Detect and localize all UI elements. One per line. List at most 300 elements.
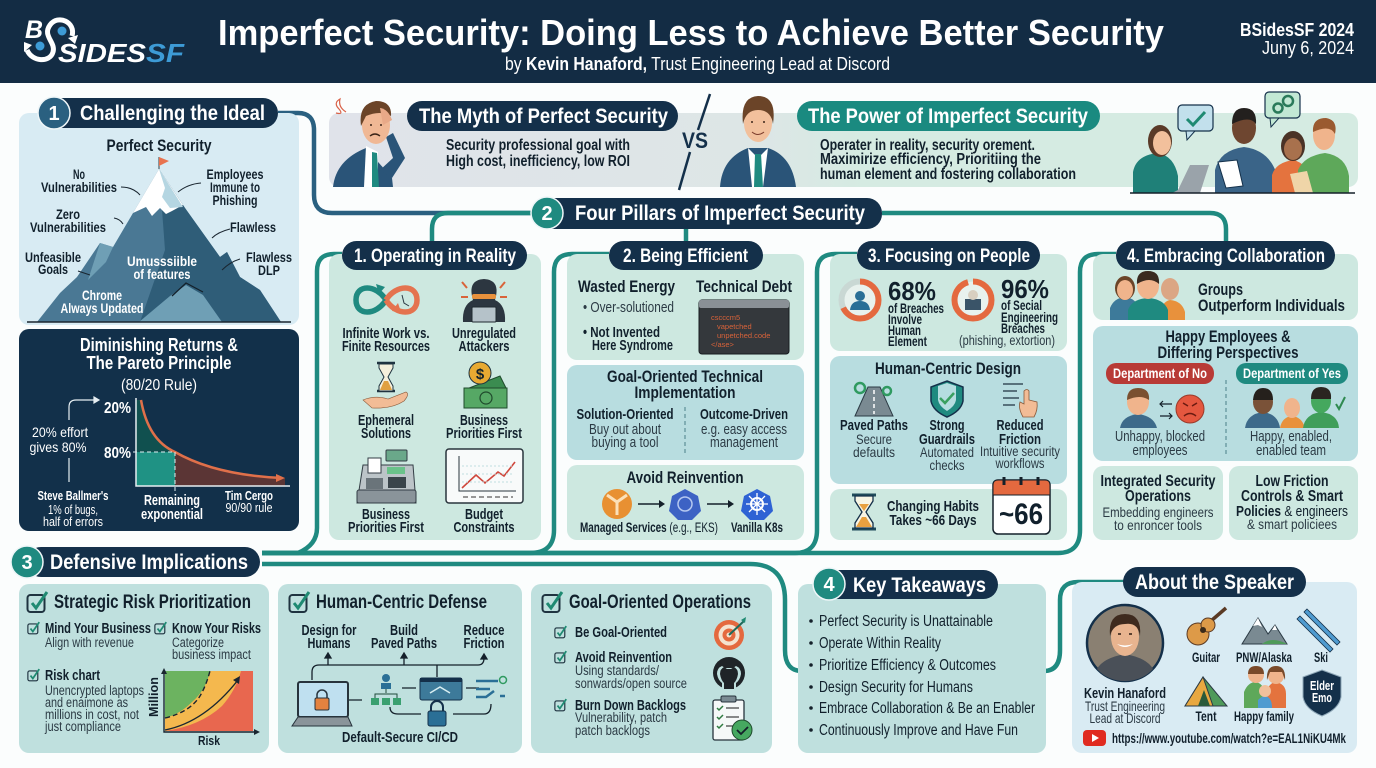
pillar 1 labels row one: Infinite Work vs. (342, 325, 430, 342)
section 1: challenging the ideal (19, 97, 299, 531)
interest labels row one: Guitar (1192, 650, 1221, 665)
takeaway list: Embrace Collaboration & Be an Enabler (819, 700, 1035, 717)
icon: checkbox (290, 592, 309, 612)
know your risks: Categorize (172, 635, 224, 650)
wasted energy text: Wasted Energy (578, 277, 675, 296)
icon: elder emo badge: Elder (1310, 678, 1334, 693)
stat: 68 percent: 68% (888, 276, 936, 306)
pillar 1 labels row two: Solutions (361, 425, 411, 442)
pareto labels (30, 424, 273, 529)
risk heat chart (146, 668, 260, 748)
mountain labels: of features (134, 266, 191, 282)
burn down backlogs (575, 697, 686, 738)
pillar 1 labels row one: Attackers (458, 338, 510, 355)
human-centric labels: Secure (856, 431, 892, 447)
heading: defensive implications: 3 (21, 552, 33, 574)
interest labels row two (1196, 709, 1294, 724)
mountain labels: Goals (38, 261, 68, 277)
know your risks: business impact (172, 647, 251, 662)
stat: 96 percent: of Secial (1001, 298, 1042, 313)
department of no: Department of No (1113, 365, 1207, 381)
interest labels row one: PNW/Alaska (1236, 650, 1292, 665)
know your risks (172, 620, 261, 662)
pareto heading: The Pareto Principle (86, 353, 232, 373)
panel: pillar 2 being efficient (567, 241, 804, 540)
integrated security text (1100, 473, 1216, 533)
panel: goal-oriented operations (531, 584, 772, 753)
panel: diminishing returns (19, 329, 299, 531)
myth description: Security professional goal with (446, 137, 630, 154)
about heading (1123, 567, 1306, 597)
low friction text (1236, 473, 1348, 532)
wasted energy text: Here Syndrome (592, 337, 673, 354)
department of no (1106, 363, 1214, 384)
integrated security text: Integrated Security (1100, 473, 1216, 490)
donut: 68 percent (842, 282, 878, 318)
reinvention labels: Managed Services (e.g., EKS) (580, 519, 718, 535)
avoid reinvention text (575, 649, 687, 691)
risk heat chart: Risk (198, 733, 221, 748)
divider (1225, 380, 1227, 455)
logo: BSidesSF (24, 16, 185, 68)
icon: calendar 66: ~66 (999, 498, 1043, 531)
department of yes (1236, 363, 1348, 384)
burn down backlogs: patch backlogs (575, 723, 650, 738)
wasted energy text: • Not Invented (583, 324, 660, 341)
sub-panel: goal-oriented implementation (567, 365, 804, 460)
icon: team collaborating (1130, 92, 1355, 193)
icon: paved paths (855, 383, 893, 416)
pareto heading: (80/20 Rule) (121, 377, 197, 394)
human-centric labels: defaults (853, 444, 895, 460)
happy employees captions: Happy, enabled, (1250, 428, 1332, 445)
human-centric labels: Automated (920, 444, 974, 460)
burn down backlogs: Burn Down Backlogs (575, 697, 686, 714)
technical debt: Technical Debt (696, 277, 792, 296)
speaker name (1084, 685, 1166, 726)
technical debt (696, 277, 792, 354)
myth description (446, 137, 630, 170)
takeaway list: Prioritize Efficiency & Outcomes (819, 657, 996, 674)
heading: four pillars (531, 197, 882, 229)
pillar 1 labels row three: Constraints (454, 519, 514, 536)
icon: managed services to vanilla k8s (602, 489, 773, 520)
heading: challenging the ideal (38, 97, 278, 129)
pareto labels: Tim Cergo (225, 488, 273, 503)
pareto labels: half of errors (43, 514, 103, 529)
sub-panel: wasted energy and debt (567, 254, 804, 360)
stat: 96 percent: Breaches (1001, 321, 1045, 336)
mountain labels: Zero (56, 206, 80, 222)
pillar 1 labels row two: Ephemeral (358, 412, 414, 429)
logo: BSidesSF: B (25, 16, 43, 44)
stat: 68 percent: Involve (888, 312, 922, 327)
goal-oriented text (576, 367, 788, 455)
power description (820, 137, 1076, 183)
mountain labels (25, 166, 292, 316)
myth heading: The Myth of Perfect Security (419, 105, 668, 128)
technical debt: </ase> (711, 340, 735, 349)
icon: padlock (428, 701, 446, 726)
mountain labels: Phishing (212, 192, 258, 208)
interest labels row one (1192, 650, 1328, 665)
sub-panel: integrated security (1093, 466, 1223, 540)
panel title: Goal-Oriented Operations (569, 592, 751, 613)
connector lines (262, 113, 1226, 671)
mountain labels: Vulnerabilities (41, 179, 117, 195)
happy employees captions: enabled team (1256, 442, 1326, 459)
panel: pillar 1 operating in reality (329, 241, 541, 540)
icon: checkbox (28, 592, 47, 612)
event and date: BSidesSF 2024 (1240, 20, 1354, 40)
mountain labels: No (73, 166, 85, 182)
risk heat chart: Million (146, 677, 161, 717)
pareto labels: gives 80% (30, 439, 86, 455)
wasted energy text (578, 277, 675, 354)
subtitle: by Kevin Hanaford, Trust Engineering Lead at Discord (505, 54, 890, 74)
defense labels: Build (390, 622, 418, 639)
key takeaways heading: 4 (823, 574, 835, 596)
panel title: Human-Centric Defense (316, 592, 487, 613)
icon: small checkbox (28, 669, 39, 681)
human-centric labels: Guardrails (919, 431, 975, 448)
pareto labels: Remaining (144, 492, 200, 509)
icon: github (713, 657, 745, 689)
risk chart text: Risk chart (45, 667, 100, 684)
icon: browser pipeline (420, 678, 462, 700)
panel: perfect security mountain (19, 113, 299, 325)
sub-panel: changing habits (830, 489, 1067, 540)
pareto labels: 1% of bugs, (48, 502, 98, 517)
icon: cash register (357, 450, 416, 503)
power heading: The Power of Imperfect Security (808, 105, 1088, 128)
icon: guitar (1187, 608, 1226, 645)
icon: infinite loop (356, 284, 417, 312)
icon: elder emo badge (1303, 670, 1341, 716)
icon: money (464, 362, 507, 408)
stat: 96 percent: 96% (1001, 274, 1049, 304)
groups text (1198, 280, 1345, 315)
pillar 4 heading: 4. Embracing Collaboration (1127, 246, 1325, 267)
heading: four pillars: Four Pillars of Imperfect Security (575, 202, 865, 225)
happy employees heading (1158, 327, 1298, 362)
happy employees heading: Happy Employees & (1166, 327, 1290, 346)
heading: defensive implications: Defensive Implications (50, 551, 248, 574)
heading: defensive implications (11, 546, 260, 578)
interest labels row two: Tent (1196, 709, 1217, 724)
pillar 4 heading (1116, 241, 1335, 270)
mountain labels: Immune to (210, 179, 260, 195)
pareto curve chart: 80% (104, 445, 131, 462)
panel: myth versus power (329, 92, 1358, 193)
pillar 3 heading: 3. Focusing on People (868, 246, 1030, 267)
icon: target (714, 617, 746, 650)
pareto labels: 20% effort (32, 424, 88, 440)
stat: 68 percent (888, 276, 944, 349)
happy employees captions: Unhappy, blocked (1115, 428, 1205, 445)
mountain subtitle: Perfect Security (106, 136, 212, 155)
icon: mountains (1242, 618, 1287, 644)
icon: hourglass in hand (363, 363, 408, 408)
takeaway list: Continuously Improve and Have Fun (819, 722, 1018, 739)
myth description: High cost, inefficiency, low ROI (446, 153, 630, 170)
human-centric labels: workflows (995, 456, 1045, 471)
technical debt: cscccm5 (711, 313, 740, 322)
panel: about the speaker (1072, 567, 1357, 753)
icon: calendar 66 (993, 477, 1050, 534)
defense labels: Paved Paths (371, 635, 437, 652)
low friction text: Low Friction (1256, 473, 1328, 490)
sub-panel: breach statistics (830, 254, 1067, 351)
panel: key takeaways (798, 568, 1046, 753)
defense labels: Design for (302, 622, 357, 639)
risk chart text: just compliance (44, 719, 121, 734)
takeaway list (819, 613, 1035, 739)
human-centric labels (840, 417, 1060, 473)
stat: 96 percent (959, 274, 1058, 348)
goal-oriented text: Implementation (634, 383, 736, 402)
icon: confident man (720, 96, 796, 187)
pillar 1 heading: 1. Operating in Reality (354, 246, 516, 267)
icon: small checkbox (555, 626, 566, 638)
wasted energy text: • Over-solutioned (583, 299, 674, 316)
icon: reduced friction (1003, 384, 1037, 417)
burn down backlogs: Vulnerability, patch (575, 710, 667, 725)
icon: small checkbox (555, 699, 566, 711)
defense labels: Friction (464, 635, 504, 652)
happy employees captions (1115, 428, 1332, 459)
pillar 1 labels row three: Business (362, 506, 410, 523)
icon: youtube (1083, 730, 1106, 746)
mountain labels: DLP (258, 262, 280, 278)
panel: pillar 4 embracing collaboration (1093, 241, 1358, 540)
integrated security text: Embedding engineers (1102, 504, 1214, 520)
pillar 1 labels row two: Business (460, 412, 508, 429)
goal-oriented text: Goal-Oriented Technical (607, 367, 763, 386)
heading: four pillars: 2 (541, 203, 553, 225)
icon: small checkbox (155, 622, 166, 634)
takeaway list: Perfect Security is Unattainable (819, 613, 993, 630)
icon: hooded attacker (461, 279, 507, 322)
event and date: Juny 6, 2024 (1262, 38, 1354, 58)
pillar 1 labels row one (342, 325, 516, 355)
integrated security text: Operations (1125, 488, 1191, 505)
human-centric labels: checks (930, 457, 964, 473)
be goal-oriented: Be Goal-Oriented (575, 624, 667, 641)
pillar 2 heading (609, 241, 763, 270)
panel: strategic risk prioritization (19, 584, 269, 753)
pareto heading (80, 335, 238, 394)
icon: checkbox (542, 592, 562, 612)
pareto curve chart (104, 398, 290, 492)
bullet dots (809, 619, 813, 732)
icon: clipboard checklist (713, 696, 752, 740)
goal-oriented text: e.g. easy access (701, 421, 787, 438)
speaker name: Trust Engineering (1085, 698, 1165, 714)
workflow arrows (312, 653, 491, 714)
mountain labels: Employees (206, 166, 264, 182)
goal-oriented text: management (710, 434, 779, 451)
icon: group of three (1110, 271, 1185, 320)
title: Imperfect Security: Doing Less to Achieve Better Security (218, 12, 1164, 53)
icon: happy team (1245, 387, 1345, 428)
heading: challenging the ideal: 1 (48, 103, 60, 125)
power description: Operater in reality, security orement. (820, 137, 1035, 154)
changing habits text: Changing Habits (887, 498, 979, 515)
versus divider: VS (682, 128, 708, 153)
stat: 68 percent: of Breaches (888, 301, 944, 316)
sub-panel: groups (1093, 254, 1358, 320)
key takeaways heading: Key Takeaways (853, 574, 986, 597)
technical debt: vapetched (717, 322, 752, 331)
pillar 1 labels row one: Unregulated (452, 325, 516, 342)
pareto labels: Steve Ballmer's (38, 488, 108, 503)
goal-oriented text: Outcome-Driven (700, 406, 788, 423)
goal-oriented text: Buy out about (589, 421, 662, 438)
logo: BSidesSF: SF (146, 38, 185, 68)
changing habits text (887, 498, 979, 529)
changing habits text: Takes ~66 Days (890, 512, 976, 529)
power heading (797, 101, 1100, 131)
speaker name: Lead at Discord (1090, 710, 1160, 726)
defense labels: Reduce (464, 622, 504, 639)
reinvention labels: Vanilla K8s (731, 519, 783, 535)
takeaway list: Design Security for Humans (819, 679, 973, 696)
sub-panel: human-centric design (830, 356, 1067, 484)
department of yes: Department of Yes (1243, 365, 1341, 381)
technical debt: unpetched.code (717, 331, 770, 340)
groups text: Groups (1198, 280, 1243, 299)
power description: Maximirize efficiency, Prioritiing the (820, 151, 1041, 168)
pillar 1 labels row one: Finite Resources (342, 338, 430, 355)
risk chart text: millions in cost, not (45, 707, 139, 722)
about heading: About the Speaker (1135, 571, 1294, 594)
icon: money: $ (476, 366, 485, 383)
sub-panel: avoid reinvention (567, 465, 804, 540)
human-centric labels: Friction (999, 431, 1041, 448)
mind your business: Align with revenue (45, 635, 134, 650)
defense labels (302, 622, 504, 652)
event and date (1240, 20, 1354, 58)
mountain labels: Umusssiible (127, 253, 197, 269)
pareto curve chart: 20% (104, 400, 131, 417)
goal-oriented text: Solution-Oriented (576, 406, 674, 423)
integrated security text: to enroncer tools (1114, 517, 1202, 533)
sub-panel: low friction (1229, 466, 1358, 540)
header banner (0, 0, 1376, 83)
icon: happy family (1244, 666, 1286, 708)
power description: human element and fostering collaboration (820, 166, 1076, 183)
mountain labels: Chrome (82, 287, 122, 303)
sub-panel: happy employees (1093, 326, 1358, 461)
pillar 1 labels row two: Priorities First (446, 425, 522, 442)
icon: guardrail shield (931, 381, 963, 417)
mind your business: Mind Your Business (45, 620, 151, 637)
avoid reinvention heading: Avoid Reinvention (626, 468, 744, 487)
interest labels row one: Ski (1314, 650, 1328, 665)
mountain labels: Flawless (230, 219, 276, 235)
panel title: Strategic Risk Prioritization (54, 592, 251, 613)
human-centric labels: Reduced (996, 417, 1044, 434)
icon: stressed man (333, 99, 405, 187)
human-centric labels: Paved Paths (840, 417, 908, 434)
versus divider (679, 94, 710, 190)
icon: flow lines (476, 676, 506, 697)
mountain labels: Vulnerabilities (30, 219, 106, 235)
happy employees captions: employees (1132, 442, 1188, 459)
stat: 68 percent: Human (888, 323, 921, 338)
heading: challenging the ideal: Challenging the Ideal (80, 102, 265, 125)
avoid reinvention text: Avoid Reinvention (575, 649, 672, 666)
pillar 1 heading (342, 241, 527, 270)
pillar 1 labels row two (358, 412, 522, 442)
stat: 96 percent: (phishing, extortion) (959, 333, 1055, 348)
low friction text: Controls & Smart (1241, 488, 1344, 505)
key takeaways heading (813, 568, 998, 600)
avoid reinvention text: Using standards/ (575, 663, 659, 678)
arrow: effort (69, 397, 99, 482)
speaker name: Kevin Hanaford (1084, 685, 1166, 702)
pillar 1 labels row three (348, 506, 514, 536)
low friction text: & smart policiees (1247, 516, 1337, 532)
pillar 1 labels row three: Budget (465, 506, 503, 523)
takeaway list: Operate Within Reality (819, 635, 941, 652)
mind your business (45, 620, 151, 650)
stat: 68 percent: Element (888, 334, 927, 349)
panel: pillar 3 focusing on people (830, 241, 1067, 540)
logo: BSidesSF: SIDES (58, 38, 147, 68)
pareto heading: Diminishing Returns & (80, 335, 238, 355)
icon: org tree (371, 674, 401, 705)
pareto labels: 90/90 rule (226, 500, 272, 515)
icon: secure laptop (292, 682, 352, 726)
happy employees heading: Differing Perspectives (1158, 343, 1298, 362)
icon: skis (1297, 609, 1340, 652)
panel: human-centric defense (278, 584, 522, 753)
pipeline caption: Default-Secure CI/CD (342, 729, 458, 746)
mountain labels: Flawless (246, 249, 292, 265)
avoid reinvention text: sonwards/open source (575, 676, 687, 691)
icon: tent (1185, 677, 1227, 706)
speaker photo (1087, 605, 1163, 681)
myth heading (407, 101, 678, 131)
icon: hourglass (852, 495, 876, 529)
interest labels row two: Happy family (1234, 709, 1294, 724)
icon: small checkbox (28, 622, 39, 634)
goal-oriented text: buying a tool (592, 434, 658, 451)
icon: mountain (27, 157, 291, 322)
icon: elder emo badge: Emo (1312, 690, 1332, 705)
pillar 2 heading: 2. Being Efficient (623, 246, 749, 267)
risk chart text (44, 667, 144, 734)
human-centric heading: Human-Centric Design (875, 359, 1021, 378)
low friction text: Policies & engineers (1236, 503, 1348, 520)
icon: budget chart (446, 449, 523, 503)
risk chart text: and enaimone as (45, 695, 128, 710)
defense labels: Humans (308, 635, 350, 652)
mountain labels: Unfeasible (25, 249, 81, 265)
risk chart text: Unencrypted laptops (45, 683, 144, 698)
icon: unhappy employee (1120, 388, 1204, 428)
pillar 3 heading (857, 241, 1040, 270)
stat: 96 percent: Engineering (1001, 310, 1058, 325)
human-centric labels: Intuitive security (980, 444, 1060, 459)
pareto labels: exponential (141, 506, 203, 523)
know your risks: Know Your Risks (172, 620, 261, 637)
donut: 96 percent (954, 282, 992, 318)
mountain labels: Always Updated (60, 300, 144, 316)
human-centric labels: Strong (930, 417, 964, 434)
